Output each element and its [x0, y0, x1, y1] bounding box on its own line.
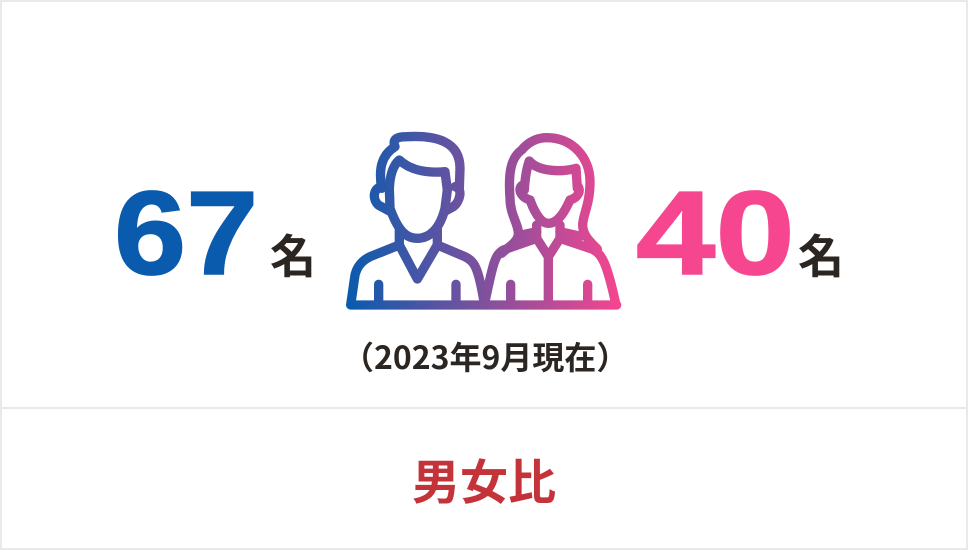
female unit label: 名 — [798, 221, 844, 287]
woman figure — [485, 138, 616, 305]
caption: 男女比 — [412, 443, 556, 513]
divider — [2, 407, 966, 409]
man figure — [351, 136, 617, 305]
date note: （2023年9月現在） — [342, 333, 628, 379]
male unit label: 名 — [270, 221, 316, 287]
female count number: 40 — [636, 167, 795, 300]
male count number: 67 — [114, 167, 258, 300]
icon: man and woman — [346, 132, 622, 310]
